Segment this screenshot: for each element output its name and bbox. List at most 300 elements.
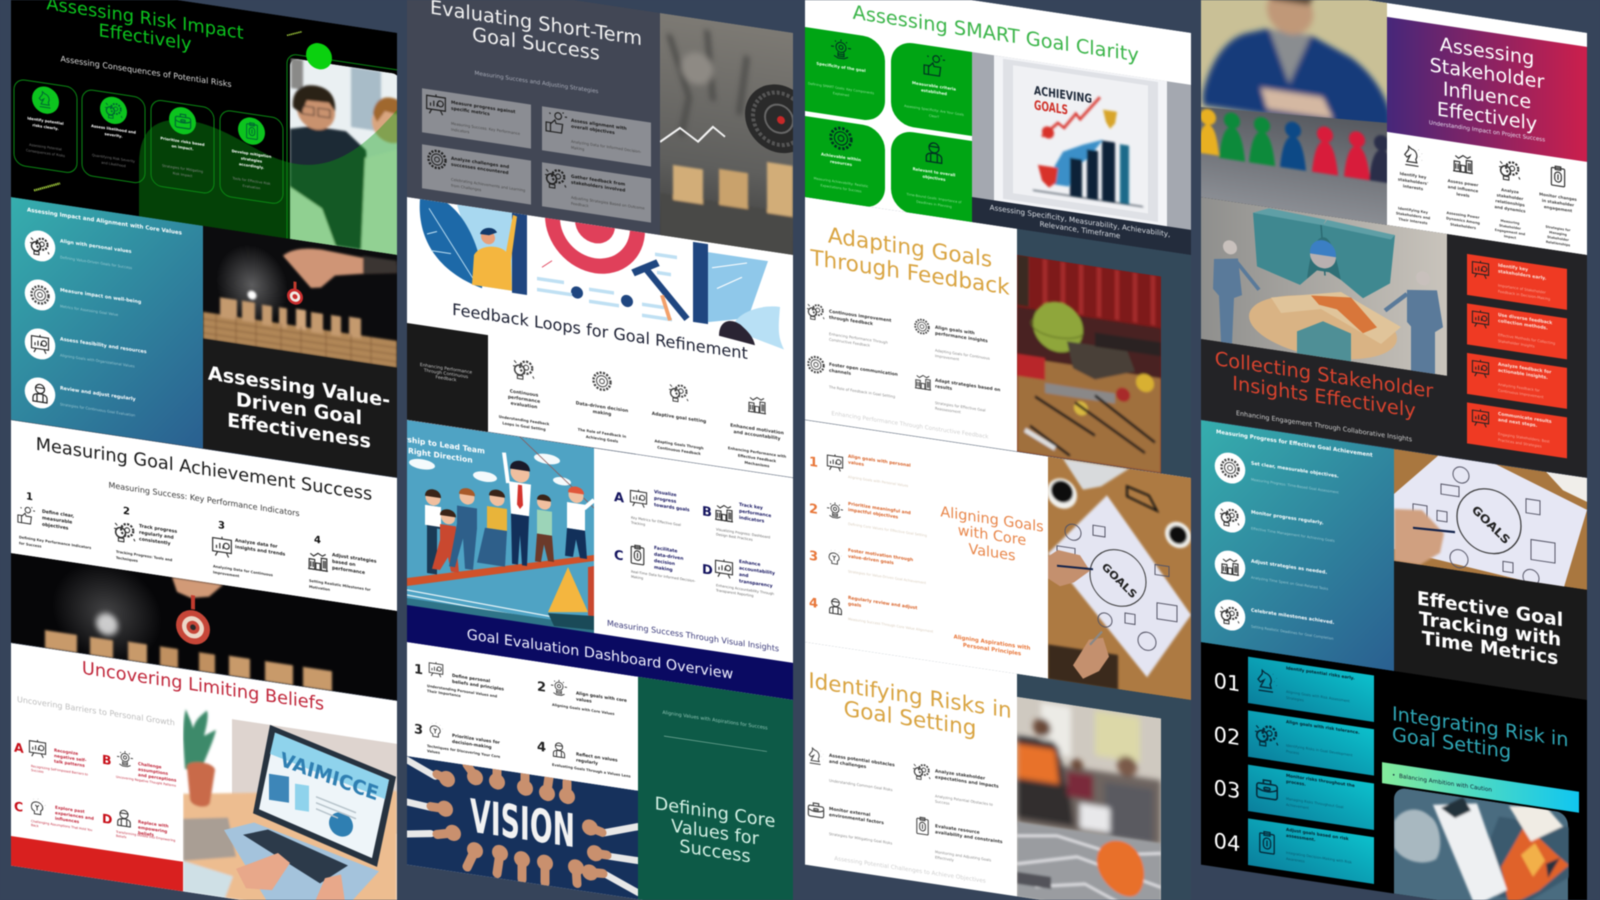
card: achievable: Expectations for Success [821,183,862,194]
column: adaptive: Adaptive goal setting [652,411,706,425]
title: Uncovering Limiting Beliefs [82,658,324,715]
slide: Assessing Value-Driven Goal Effectiveness [11,197,397,478]
title: Measuring Goal Achievement Success [36,434,372,505]
item C: data-driven [654,552,683,562]
title: Time Metrics [1422,627,1558,670]
title: Assessing [1440,33,1534,70]
item 2: 2 [809,502,818,518]
item: obstacles: Assess potential obstacles [829,753,895,769]
item: continuous improvement: Enhancing Performance Through [829,332,888,345]
item 1: 1 [414,662,423,678]
item B [102,748,177,788]
item 2 [809,495,927,538]
slide: Feedback Loops for Goal Refinement [407,145,793,478]
item: resources: Monitoring and Adjusting Goals [935,850,991,862]
item C: Real-Time Data for Informed Decision- [631,570,696,583]
dark sidebar: Feedback [436,374,457,383]
title: Effectiveness [227,409,371,453]
card: analyze challenges: Celebrating Achievements and Learning [451,178,526,193]
card: gather feedback: Feedback [571,202,589,208]
column: engagement: in stakeholder [1542,198,1574,208]
photo: stones, dial and wooden blocks [659,12,794,255]
column: engagement: Stakeholder [1547,235,1569,242]
column: motivation: Effective Feedback [738,454,777,463]
card: measurable: Clear? [929,114,939,119]
item D: transparency [739,578,773,589]
item: resources [917,817,1003,870]
item B: Design Best Practices [716,532,753,542]
title: Insights Effectively [1232,372,1416,422]
column: relationships: Stakeholder [1499,223,1521,231]
title: Goal Setting [1392,723,1511,763]
card: identify: Feedback in Decision-Making [1498,290,1550,301]
card: assess alignment: Analyzing Data for Informed Decision- [571,140,642,154]
photo: ball and tools on a workbench [1016,254,1162,474]
item: stakeholders [913,763,999,813]
card: identify [1467,254,1567,310]
item 1 [414,659,504,705]
item A: Recognize [54,747,78,756]
card: assess likelihood: Quantifying Risk Severity [92,153,135,164]
item 3: Techniques for Discovering Your Core [427,744,501,759]
step 03: Managing Risks Throughout Goal [1286,797,1344,809]
poster chart [1033,87,1143,207]
step 01: 01 [1214,668,1240,696]
step 02: Process [1286,749,1299,755]
KPI 4: based on [332,559,356,568]
item C: making [654,565,673,573]
column: interests: Identifying Key [1398,206,1429,215]
dark sidebar: Through Continuous [423,367,469,380]
column: relationships: Impact [1504,234,1517,240]
item: external factors: environmental factors [829,812,884,826]
teal list panel [1201,420,1394,672]
panel title: Values for [671,816,760,850]
card: measure progress: Measuring Success: Key Performance [451,122,521,136]
column: power [1446,153,1480,231]
item B: and perceptions [138,772,177,783]
item D: Enhancing Accountability Through [716,583,774,596]
panel caption: Aligning Values with Aspirations for Success [662,710,768,732]
item 2: Defining Core Values for Effective Goal Setting [848,522,927,538]
list item 1: Measuring Progress: Time-Based Goal Assessment [1251,478,1339,495]
caption band [972,197,1191,256]
poster heading: ACHIEVING [1034,83,1092,106]
item: align goals: Adapting Goals for Continuous [935,349,990,361]
KPI 2: 2 [123,506,130,518]
slide: Integrating Risk in Goal Setting [1201,642,1587,900]
card: measure progress: Measure progress against [451,100,515,115]
card: analyze challenges [422,144,531,205]
card: achievable: resources [830,159,853,167]
slide: Evaluating Short-Term Goal Success [407,0,813,259]
item: obstacles: Understanding Common Goal Risks [829,779,893,792]
item A: progress [654,496,677,505]
column: adaptive: Adapting Goals Through [654,439,704,451]
card: analyze challenges: successes encountered [451,162,508,176]
item 2: Align goals with core [576,690,627,704]
red footer band [11,836,183,892]
caption band: Assessing Specificity, Measurability, Achievability, [990,203,1170,239]
photo: wooden blocks and target [202,226,398,368]
step 04: Integrating Decision-Making with Risk [1286,851,1353,865]
column: power: levels [1456,191,1470,198]
item 4: 4 [809,596,818,612]
footer caption: Measuring Success Through Visual Insights [607,619,779,653]
item D: Transparent Reporting [715,588,754,598]
photo: goals worksheet [1393,448,1588,590]
item: align goals: Improvement [935,354,960,362]
item: adapt strategies: Adapt strategies based on [935,378,1000,393]
slide: Defining Core Values for Success [407,642,793,900]
column: engagement: Strategies for [1546,225,1571,232]
card: develop mitigation: Tools for Effective Risk [231,176,271,186]
item 3: 3 [809,549,818,565]
list item 1: Set clear, measurable objectives. [1251,461,1339,480]
slide: Collecting Stakeholder Insights Effectively [1201,197,1587,478]
item 3: Values [427,749,440,755]
list item 2 [24,278,142,316]
item D: empowering [138,825,167,834]
item 1: Align goals with personal [848,453,911,469]
column: data-driven: making [593,409,611,418]
column: interests: Their Interests [1398,217,1428,225]
column: power: and influence [1448,184,1478,194]
card: assess alignment [542,106,651,167]
card: identify risks: risks clearly. [32,123,59,131]
panel title: Defining Core [655,793,775,832]
subtitle: Measuring Success: Key Performance Indicators [108,481,300,518]
card: measurable: Assessing Specificity: Are Your Goals [904,104,964,117]
KPI 4: 4 [314,534,321,546]
column: data-driven: The Role of Feedback in [578,428,627,439]
item B: Track key [739,502,763,511]
item 1: Define personal [452,673,491,685]
title: Goal Setting [844,697,976,742]
column: motivation: Enhancing Performance with [728,446,787,459]
panel heading: Assessing Impact and Alignment with Core Values [27,207,183,237]
card: communicate: Engaging Stakeholders: Best [1498,432,1550,444]
card: develop mitigation [220,109,283,205]
slide: Effective Goal Tracking with Time Metrics [1201,405,1587,701]
photo: target and blocks [10,552,398,702]
step 01: Strategies [1286,696,1304,702]
item C: C [14,799,23,815]
list item 4 [1215,597,1334,646]
team members [425,441,594,598]
image heading: Right Direction [408,446,473,465]
item 1 [809,448,911,488]
card: feedback methods: Effective Methods for Collecting [1498,333,1555,346]
teal list panel [11,197,203,449]
illustration: team on a boat [406,420,595,634]
item A: A [14,740,24,756]
item D: and [739,572,748,579]
KPI 1: objectives [42,522,69,532]
item B: Challenge [138,761,162,770]
item D: D [102,811,112,827]
title: Adapting Goals [828,224,992,273]
column: data-driven: Achieving Goals [586,435,618,444]
decorative squiggle top [286,30,302,37]
card: communicate: and next steps. [1498,417,1538,429]
item: external factors [808,802,892,845]
list item 3: Adjust strategies as needed. [1251,559,1327,576]
card: measure progress: specific metrics [451,106,490,117]
title: with Core [958,523,1026,549]
navy title band [407,605,793,701]
item: foster communication [808,356,898,399]
step 02: 02 [1214,721,1240,750]
column: continuous evaluation: performance [508,394,540,405]
card: identify risks [14,78,77,174]
column: continuous evaluation: evaluation [511,401,537,411]
step 03: process. [1286,779,1306,787]
list item 4: Review and adjust regularly [60,385,137,403]
step 02: Align goals with risk tolerance. [1286,719,1360,735]
item 4: 4 [537,740,546,756]
step 04 [1214,813,1374,884]
item 1: 1 [809,455,818,471]
column: continuous evaluation: Understanding Feedback [499,415,550,426]
item: adapt strategies: Strategies for Effective Goal [935,401,986,413]
card: achievable: Measuring Achievability: Realistic [814,176,869,189]
photo: VISION with fists [406,755,639,900]
item C: decision [654,558,675,567]
card: assess alignment: Assess alignment with [571,118,627,132]
item 3: 3 [414,722,423,738]
item C: Challenging Assumptions That Hold You [31,819,92,832]
KPI 3: Improvement [213,570,240,578]
card: analyze challenges: Analyze challenges and [451,156,509,170]
card: analyze feedback [1467,353,1567,409]
card: achievable [800,115,885,210]
subtitle: Measuring Success and Adjusting Strategies [475,71,599,95]
item C [14,798,94,832]
card: relevant: objectives [922,174,946,182]
step 04: Adjust goals based on risk [1286,827,1349,841]
column: interests [1396,144,1431,226]
KPI 3: Analyzing Data for Continuous [213,564,273,577]
card: prioritize risks: Prioritize risks based [160,136,205,147]
card: feedback methods [1467,303,1567,359]
item: stakeholders: Analyzing Potential Obstacles to [935,794,994,807]
column: adaptive [652,381,706,457]
item C: Explore past [55,805,85,814]
poster panel [972,52,1191,231]
list item 4: Setting Realistic Deadlines for Goal Completion [1251,625,1333,641]
card: identify risks: Consequences of Risks [26,148,65,158]
KPI 2 [113,506,178,563]
item C: Back [31,823,39,828]
column: engagement: Monitor changes [1539,191,1577,202]
item 2: 2 [537,680,546,696]
list item 4 [24,376,136,417]
item: obstacles: and challenges [829,759,867,770]
column: interests: Identify key [1400,171,1427,180]
KPI 3: insights and trends [235,544,286,558]
item 4: Evaluating Goals Through a Values Lens [552,763,631,779]
list item 3: Analyzing Time Spent on Goal-Related Tasks [1251,576,1328,591]
column: continuous evaluation [499,358,550,432]
card: specificity: Specificity of the goal [816,61,866,73]
item B: indicators [739,515,765,525]
slide: Aligning Goals with Core Values [805,420,1191,701]
photo: two colleagues [289,58,398,256]
item C: experiences and [55,810,94,821]
KPI 3: 3 [218,520,225,532]
list item 1 [1215,450,1339,500]
title: Aligning Goals [940,504,1044,536]
item A: Key Metrics for Effective Goal [631,516,681,527]
illustration: laptop on desk: VAIMICCE [278,747,381,805]
KPI 1: Define clear, [42,509,74,519]
KPI 2: regularly and [139,530,174,541]
card: prioritize risks [151,99,214,194]
item: stakeholders: expectations and impacts [935,774,999,790]
item C [614,539,696,588]
title: Collecting Stakeholder [1215,347,1434,403]
item 1: values [848,459,864,468]
item 4: Reflect on values [576,751,618,764]
card: feedback methods: collection methods. [1498,318,1548,332]
item 2: Prioritize meaningful and [848,501,911,516]
item B: performance [739,508,771,519]
photo: goals worksheet: GOALS [1469,503,1513,547]
green overlay shape [138,110,398,256]
list item 2: Measure impact on well-being [60,287,142,306]
decorative squiggle bottom [33,182,61,192]
item 3: decision-making [452,739,492,751]
item 2: Aligning Goals with Core Values [552,703,614,716]
card: prioritize risks: Risk Impact [173,171,193,178]
column: interests: interests [1403,183,1424,191]
item: continuous improvement [807,304,891,351]
list item 2: Metrics for Assessing Goal Value [60,304,119,317]
white content panel [805,642,1017,897]
photo: businessman and coloured pawns [1200,0,1388,226]
column 2 of slides [378,0,813,900]
gradient title panel [1387,17,1587,162]
card: develop mitigation: strategies [241,157,263,164]
item 3 [809,542,927,585]
title: Tracking with [1419,608,1561,651]
subtitle: Enhancing Engagement Through Collaborative Insights [1236,409,1413,444]
footer caption: Assessing Potential Challenges to Achieve Objectives [834,856,986,885]
column 1 of slides [11,0,412,900]
green tag: • [1392,773,1395,779]
card: assess likelihood: Assess likelihood and [91,124,136,135]
KPI 4: Adjust strategies [332,552,377,565]
item C: C [614,548,624,564]
column: motivation: Enhanced motivation [730,423,784,437]
slide: Assessing Risk Impact Effectively [11,0,412,272]
item: foster communication: Foster open communication [829,362,898,378]
item: continuous improvement: through feedback [829,315,874,327]
step 02: Identifying Risks in Goal Development [1286,743,1353,758]
card: relevant: Time-Bound Goals: Importance of [906,192,962,205]
column: data-driven [576,369,628,445]
title: Feedback Loops for Goal Refinement [452,300,748,363]
item B: Uncovering Negative Thought Patterns [116,775,176,788]
item 2: impactful objectives [848,507,899,521]
KPI 2: consistently [139,536,170,547]
card: gather feedback: stakeholders involved [571,180,625,194]
card: identify risks: Identify potential [27,116,64,126]
card: analyze challenges: from Challenges [451,184,481,192]
item: continuous improvement: Constructive Feedback [829,338,871,348]
subtitle: Personal Principles [963,643,1021,657]
KPI 1: measurable [42,515,72,526]
title: Identifying Risks in [808,669,1012,724]
item B: B [102,752,112,768]
KPI 4: performance [332,565,365,576]
item C: Facilitate [654,545,677,555]
KPI 2: Tracking Progress: Tools and [116,550,173,562]
column: data-driven: Data-driven decision [576,400,628,414]
card: communicate: Communicate results [1498,411,1552,425]
KPI 1: Defining Key Performance Indicators [19,535,91,550]
item 3: Foster motivation through [848,547,913,563]
card: relevant: Relevant to overall [913,166,956,178]
card: specificity [800,26,885,123]
green tag: Balancing Ambition with Caution [1399,774,1492,794]
item 4: Measuring Success Through Core Value Alignment [848,617,934,634]
item D: beliefs [138,830,154,838]
subtitle: Uncovering Barriers to Personal Growth [17,695,175,728]
item A: A [614,490,625,507]
item: continuous improvement: Continuous improvement [829,309,891,324]
step 01: Identify potential risks early. [1286,665,1355,681]
column: motivation: Mechanisms [745,461,769,468]
item 4 [809,589,934,634]
item: align goals: performance insights [935,331,988,344]
column: relationships: Analyze [1501,187,1519,195]
item 4: Regularly review and adjust [848,595,917,611]
title: Stakeholder [1430,53,1544,93]
green tag [1382,762,1579,813]
card: prioritize risks: Strategies for Mitigating [162,164,203,174]
card: develop mitigation: Develop mitigation [232,149,272,159]
card: analyze feedback: Continuous Improvement [1498,389,1544,399]
card: assess likelihood: and Likelihood [101,161,126,168]
step 01: Aligning Goals with Risk Assessment [1286,690,1350,703]
card: measurable: Measurable criteria [912,80,956,92]
title: Through Feedback [809,246,1010,301]
item 4: regularly [576,757,598,767]
KPI 1: for Success [19,541,41,549]
KPI 3: Analyze data for [235,538,278,550]
item D: Beliefs [116,834,127,839]
column 4 of slides [1197,0,1587,900]
slide: Measuring Goal Achievement Success [11,420,397,706]
slide: Uncovering Limiting Beliefs [11,643,397,900]
card: measurable: established [921,87,947,96]
KPI 4 [307,535,377,592]
card: specificity: Defining SMART Goals: Key Components [808,81,874,95]
item 1: Aligning Goals with Personal Values [848,475,908,488]
list item 1 [24,230,132,270]
item: adapt strategies: Reassessment [935,407,961,414]
step 04: Awareness [1286,857,1305,864]
item B [702,496,771,545]
card: communicate [1467,402,1567,458]
item 3: Strategies for Value-Driven Goal Achievement [848,569,927,585]
item D: Transforming Doubts into Empowering [115,830,175,843]
item B: B [702,504,712,521]
item D [702,553,775,601]
column: power: Dynamics Among [1446,216,1480,225]
